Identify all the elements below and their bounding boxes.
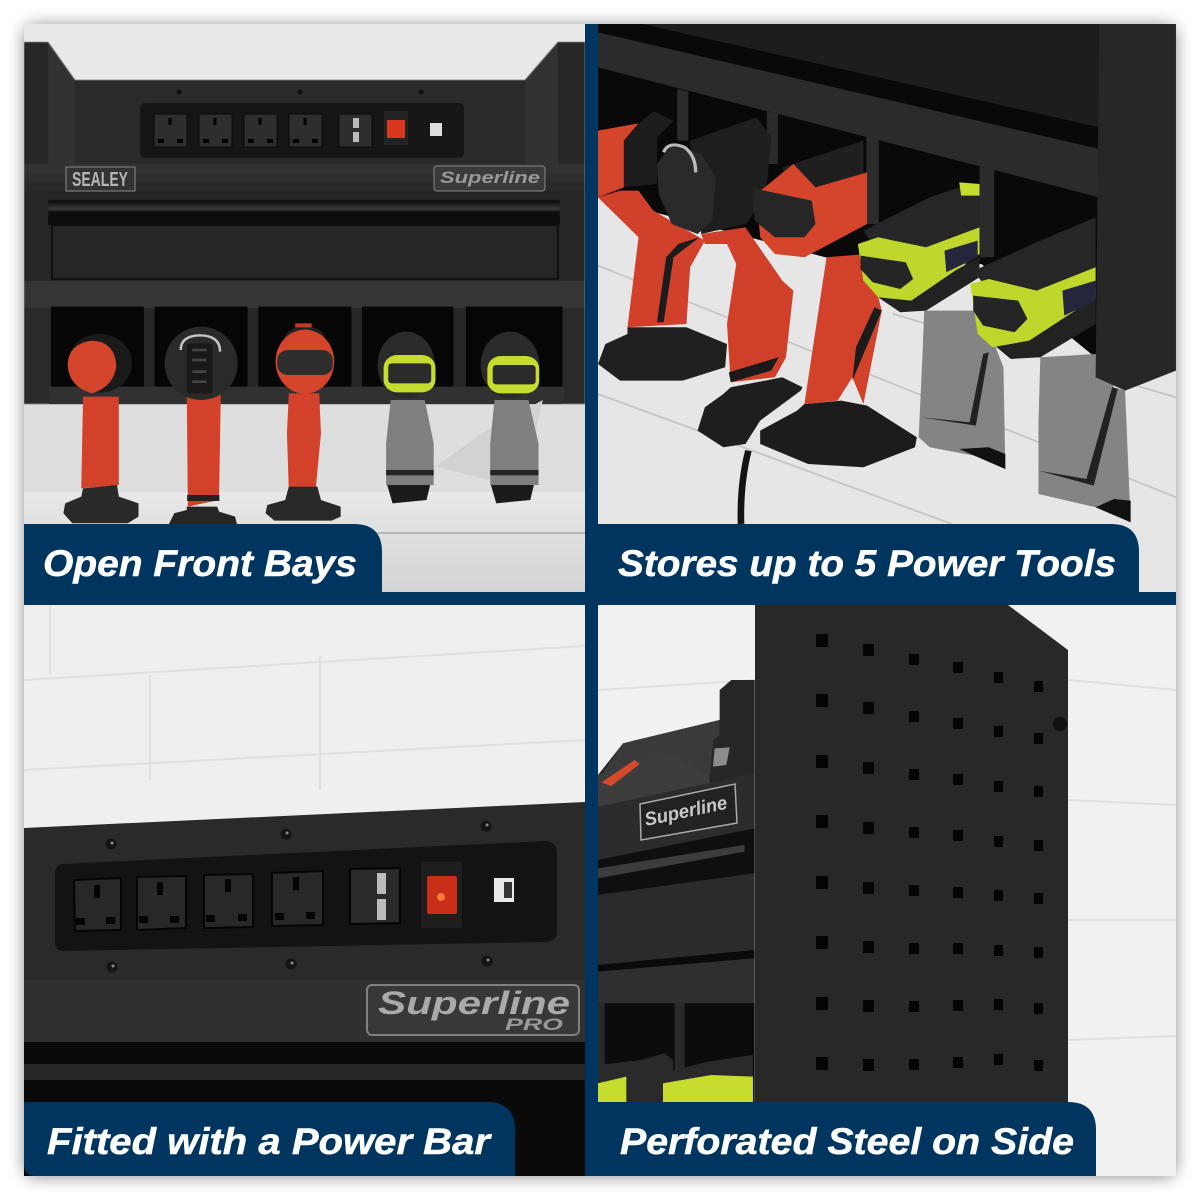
power strip <box>140 103 464 158</box>
badge: SEALEY <box>66 167 135 191</box>
tool 4 <box>858 182 1005 469</box>
panel: open front bays <box>24 24 585 592</box>
badge: Superline PRO: Superline <box>440 168 540 187</box>
screws <box>179 90 421 94</box>
tab: Fitted with a Power Bar <box>24 1102 515 1176</box>
tab: Stores up to 5 Power Tools: Stores up to 5 Power Tools <box>618 543 1116 584</box>
panel: perforated steel on side <box>598 605 1176 1176</box>
bays and drills <box>49 307 564 524</box>
badge: Superline PRO <box>367 985 579 1035</box>
panel: fitted with a power bar <box>24 605 585 1176</box>
cabinet seen from the side <box>598 680 755 1103</box>
reset label <box>494 878 514 902</box>
ledge <box>49 387 564 404</box>
badge: Superline PRO: Superline <box>378 985 570 1021</box>
power bar <box>55 841 557 951</box>
panel: stores up to 5 power tools <box>598 24 1176 592</box>
drill 5 <box>481 332 539 503</box>
tab: Perforated Steel on Side: Perforated Steel on Side <box>620 1121 1074 1162</box>
tool 3 <box>753 141 917 467</box>
perforated side panel <box>755 605 1068 1176</box>
red rocker switch <box>421 862 462 928</box>
USB panel <box>350 868 400 924</box>
tool 1 <box>598 111 727 381</box>
socket 2 <box>137 876 186 930</box>
badge: Superline PRO <box>640 784 737 840</box>
drill 2 <box>165 327 238 524</box>
wall shadow <box>435 400 543 480</box>
drill 1 <box>63 334 138 523</box>
tab: Stores up to 5 Power Tools <box>585 524 1139 592</box>
drill 4 <box>378 332 435 503</box>
badge: Superline PRO: PRO <box>505 1015 563 1034</box>
cable <box>741 451 748 524</box>
wall lines <box>598 266 1176 524</box>
drill 3 <box>266 323 341 521</box>
cabinet top and bays <box>598 24 1114 361</box>
tab: Perforated Steel on Side <box>585 1102 1096 1176</box>
bay interiors <box>51 307 562 387</box>
cabinet side <box>1096 24 1176 391</box>
cabinet front <box>24 802 585 1176</box>
tab: Open Front Bays <box>24 524 382 592</box>
tool 5 <box>970 217 1131 522</box>
socket 1 <box>74 878 121 931</box>
socket 3 <box>204 874 253 928</box>
badge: Superline PRO: Superline <box>643 793 730 831</box>
tab: Fitted with a Power Bar: Fitted with a Power Bar <box>47 1121 493 1162</box>
badge: SEALEY: SEALEY <box>72 169 128 191</box>
tool 2 <box>657 117 803 447</box>
socket 4 <box>272 871 323 926</box>
badge: Superline PRO <box>434 166 545 191</box>
cabinet <box>24 42 585 404</box>
screws <box>111 825 488 967</box>
tab: Open Front Bays: Open Front Bays <box>43 543 357 584</box>
